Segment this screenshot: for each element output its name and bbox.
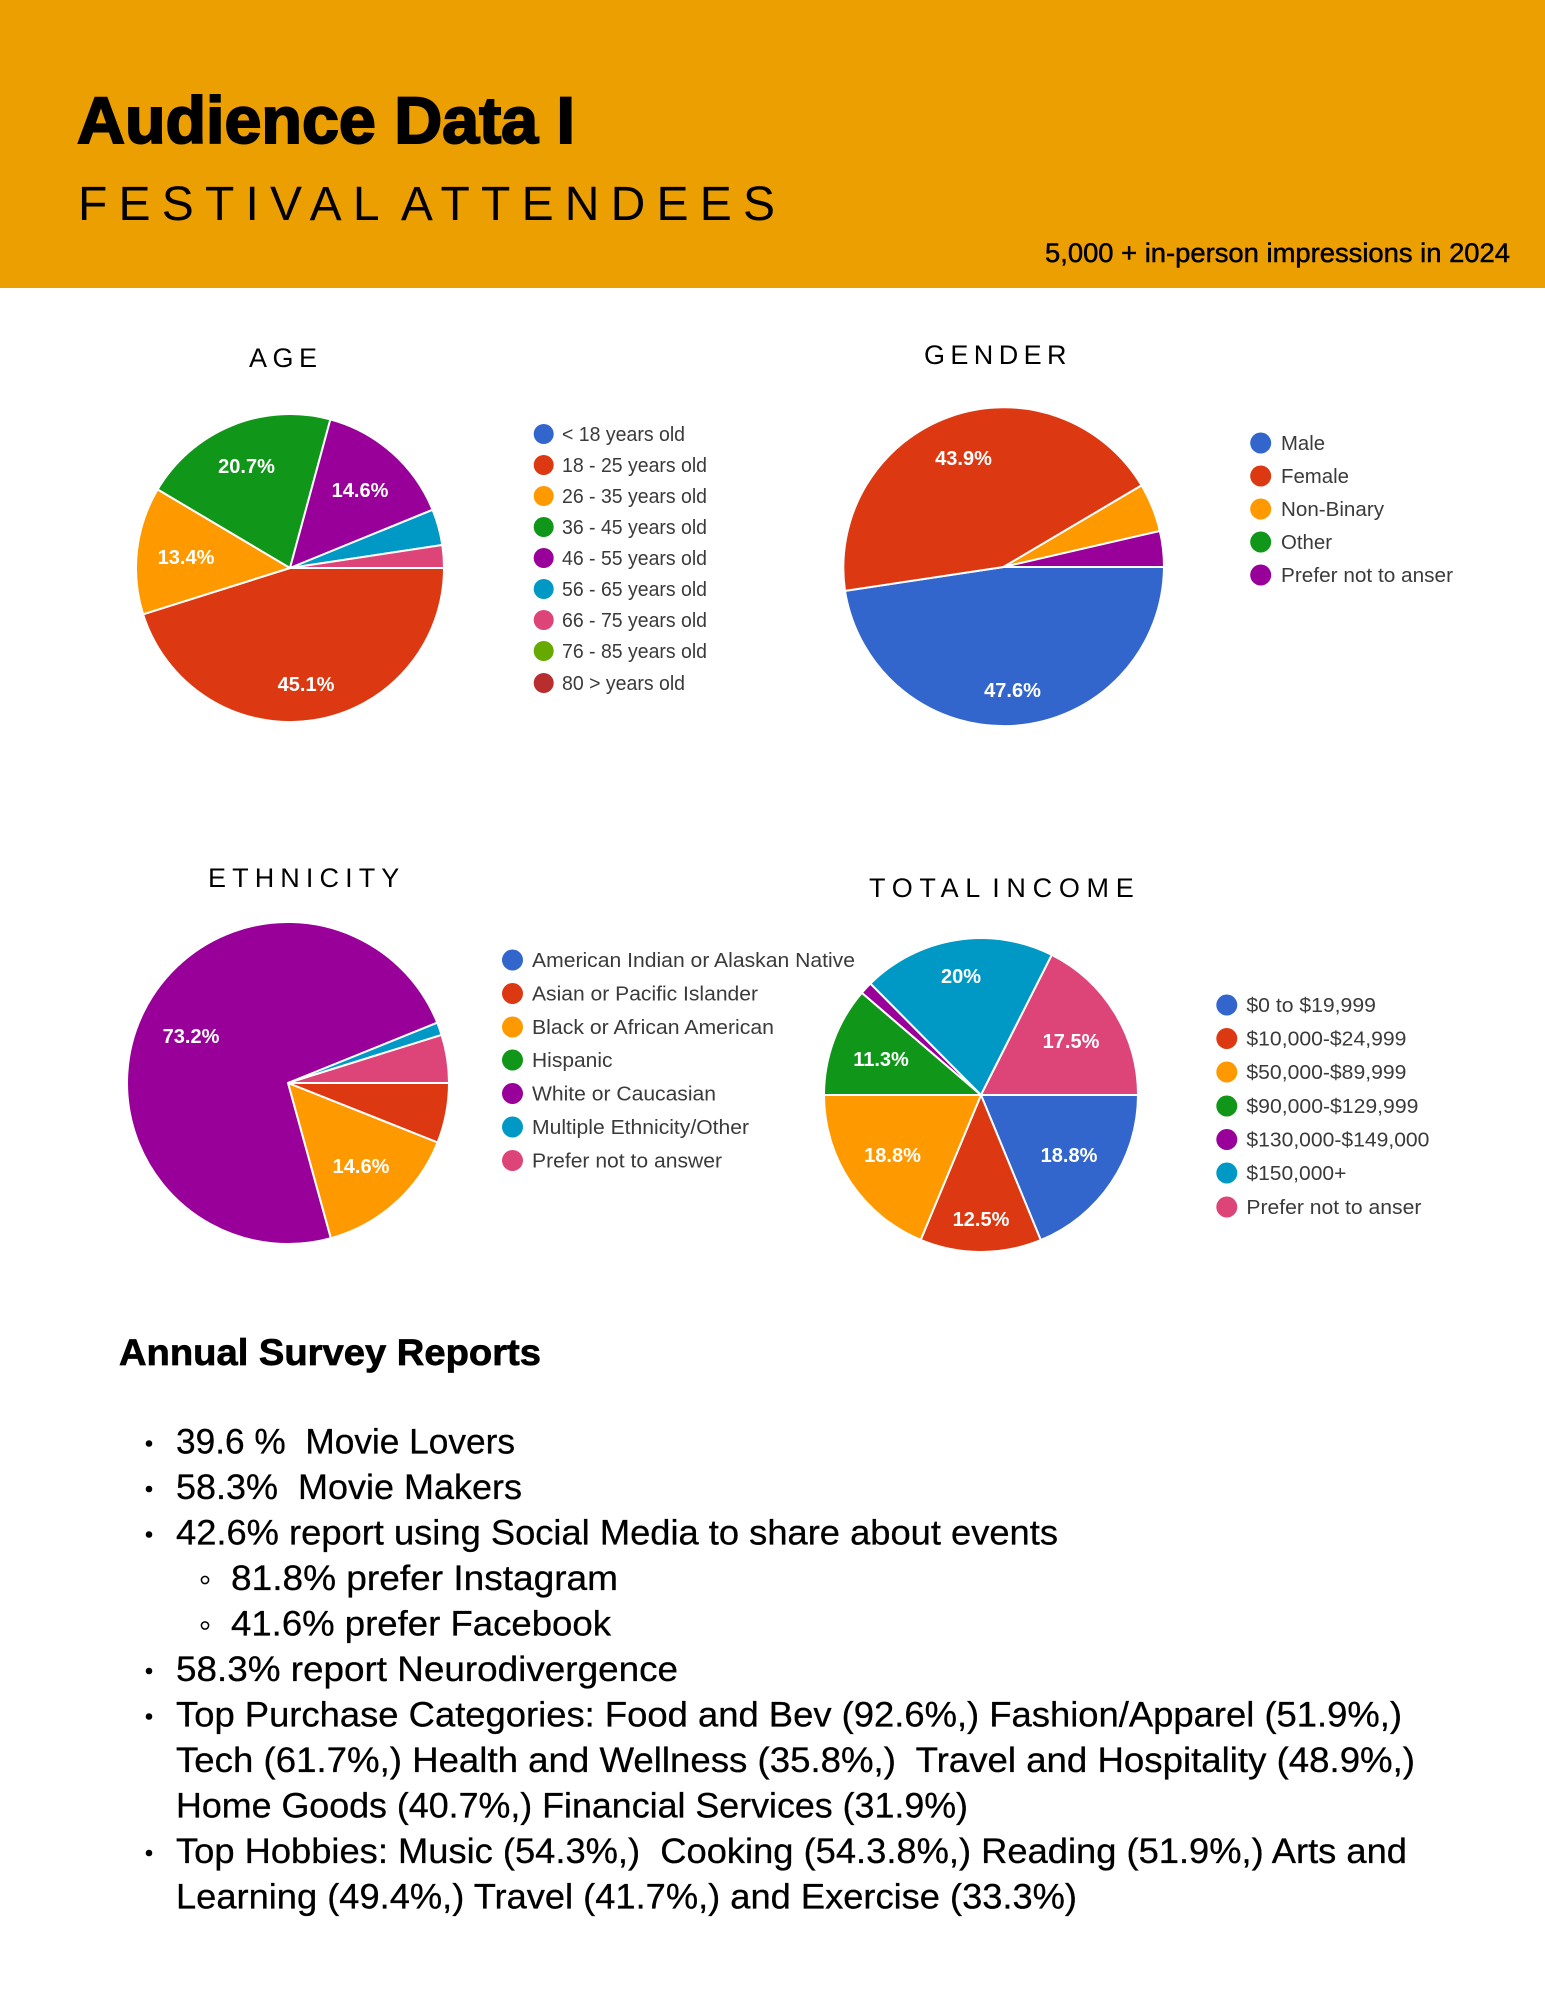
title: Audience Data I (77, 83, 575, 157)
bullet list: 41.6% prefer Facebook (231, 1604, 612, 1644)
heading: ethnicity: ETHNICITY (208, 863, 405, 893)
pie chart: age: 20.7% (218, 456, 275, 478)
legend: total income: $150,000+ (1246, 1163, 1346, 1185)
bullet list: Top Hobbies: Music (54.3%,) Cooking (54.3.8%,) Reading (51.9%,) Arts and (176, 1832, 1407, 1871)
legend: total income: Prefer not to anser (1246, 1197, 1422, 1219)
pie chart: gender: 47.6% (984, 680, 1041, 702)
pie chart: ethnicity: 14.6% (333, 1156, 390, 1178)
legend: gender: Prefer not to anser (1281, 565, 1453, 587)
heading: gender: GENDER (924, 340, 1072, 370)
legend: age: 18 - 25 years old (562, 455, 707, 477)
legend: gender: Non-Binary (1281, 499, 1384, 521)
pie chart: age: 13.4% (158, 547, 215, 569)
legend: age: < 18 years old (562, 424, 685, 446)
legend: age: 66 - 75 years old (562, 610, 707, 632)
legend: ethnicity: Multiple Ethnicity/Other (532, 1117, 749, 1139)
pie chart: total income: 17.5% (1043, 1031, 1100, 1053)
legend: age: 36 - 45 years old (562, 517, 707, 539)
bullet list: 39.6 % Movie Lovers (176, 1422, 515, 1462)
panel: ethnicity (127, 863, 855, 1244)
bullet list: Tech (61.7%,) Health and Wellness (35.8%,) Travel and Hospitality (48.9%,) (176, 1741, 1415, 1780)
header band (0, 0, 1545, 288)
legend: age: 26 - 35 years old (562, 486, 707, 508)
legend: ethnicity: Asian or Pacific Islander (532, 984, 758, 1006)
legend: total income: $0 to $19,999 (1246, 995, 1376, 1017)
legend: gender: Other (1281, 532, 1332, 554)
bullet list: Learning (49.4%,) Travel (41.7%,) and Exercise (33.3%) (176, 1878, 1077, 1916)
legend: age: 76 - 85 years old (562, 641, 707, 663)
panel: gender (843, 340, 1453, 726)
legend: gender (1250, 432, 1453, 587)
heading: total income: TOTAL INCOME (869, 873, 1140, 903)
pie chart: gender: 43.9% (935, 448, 992, 470)
legend: age: 80 > years old (562, 673, 685, 695)
pie chart: age (136, 414, 444, 722)
pie chart: total income: 11.3% (853, 1049, 909, 1071)
pie chart: total income: 12.5% (953, 1209, 1010, 1231)
bullet list: 81.8% prefer Instagram (231, 1559, 618, 1598)
bullet list: 58.3% report Neurodivergence (176, 1650, 678, 1689)
legend: total income: $130,000-$149,000 (1246, 1130, 1429, 1152)
bullet list: Top Purchase Categories: Food and Bev (92.6%,) Fashion/Apparel (51.9%,) (176, 1696, 1402, 1734)
legend: ethnicity: White or Caucasian (532, 1084, 716, 1106)
bullet list: 58.3% Movie Makers (176, 1468, 522, 1507)
bullet list: Home Goods (40.7%,) Financial Services (31.9%) (176, 1786, 968, 1826)
panel: annual survey reports (119, 1332, 1415, 1916)
legend: gender: Male (1281, 433, 1325, 455)
heading: annual survey reports: Annual Survey Reports (119, 1332, 541, 1373)
legend: ethnicity (502, 950, 855, 1172)
legend: ethnicity: American Indian or Alaskan Native (532, 950, 855, 972)
bullet list (146, 1422, 1415, 1916)
legend: age: 56 - 65 years old (562, 579, 707, 601)
legend: gender: Female (1281, 466, 1349, 488)
pie chart: age: 45.1% (278, 674, 335, 696)
subtitle: FESTIVAL ATTENDEES (78, 178, 786, 231)
legend: total income: $90,000-$129,999 (1246, 1096, 1418, 1118)
bullet list: 42.6% report using Social Media to share about events (176, 1514, 1058, 1552)
pie chart: ethnicity: 73.2% (163, 1026, 220, 1048)
pie chart: total income (824, 938, 1138, 1252)
pie chart: total income: 20% (941, 966, 981, 988)
legend: age (534, 424, 707, 695)
legend: ethnicity: Hispanic (532, 1050, 612, 1072)
pie chart: total income: 18.8% (1041, 1145, 1098, 1167)
pie chart: age: 14.6% (332, 480, 389, 502)
pie chart: ethnicity (127, 922, 449, 1244)
legend: total income: $10,000-$24,999 (1246, 1028, 1406, 1050)
impressions note: 5,000 + in-person impressions in 2024 (1045, 238, 1510, 268)
pie chart: total income: 18.8% (864, 1145, 921, 1167)
panel: total income (824, 873, 1429, 1252)
legend: ethnicity: Black or African American (532, 1017, 774, 1039)
panel: age (136, 343, 707, 722)
legend: total income (1216, 994, 1429, 1219)
heading: age: AGE (249, 343, 323, 373)
legend: age: 46 - 55 years old (562, 548, 707, 570)
pie chart: gender (843, 407, 1164, 726)
legend: total income: $50,000-$89,999 (1246, 1062, 1406, 1084)
legend: ethnicity: Prefer not to answer (532, 1150, 722, 1172)
